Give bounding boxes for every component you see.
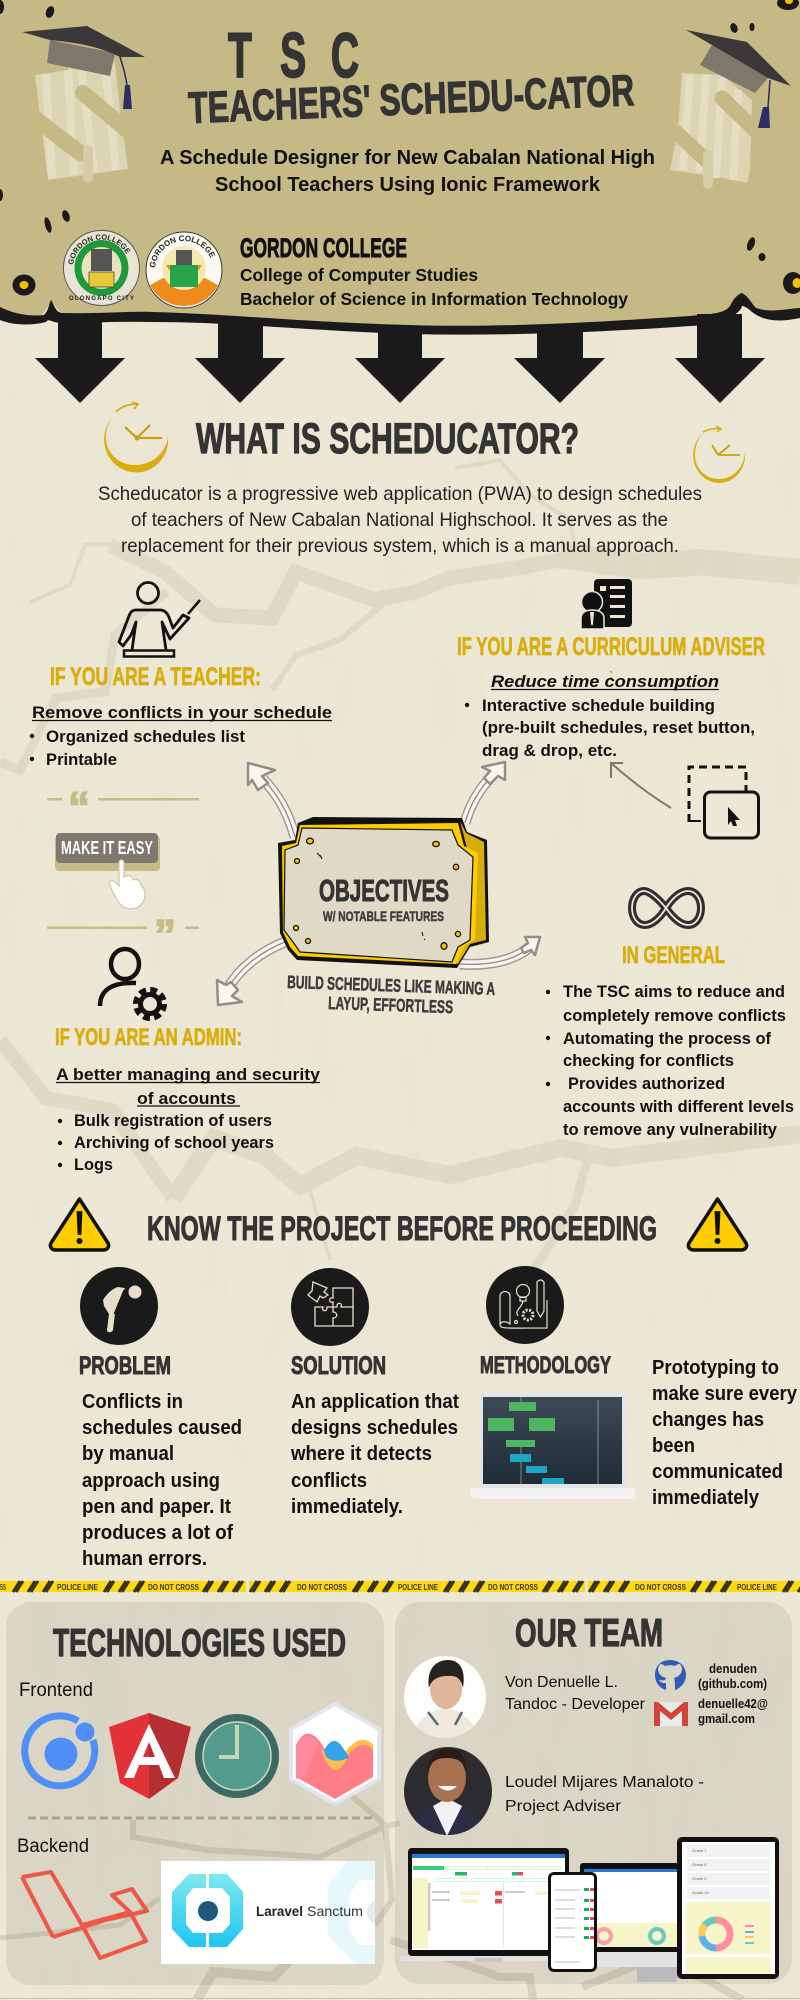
icon: problem [80,1267,158,1345]
heading: what is scheducator: WHAT IS SCHEDUCATOR? [196,415,579,463]
panel: objectives sign [278,817,489,968]
text: general list: to remove any vulnerability [563,1120,778,1139]
text: general list: completely remove conflicts [563,1006,786,1025]
text: admin features: of accounts [137,1089,236,1108]
text: email: gmail.com [698,1712,755,1726]
text: developer name [505,1674,646,1713]
quote decoration bottom: ” [154,911,176,960]
heading: technologies used: TECHNOLOGIES USED [53,1622,346,1665]
text: problem: human errors. [82,1548,207,1570]
heading: solution: SOLUTION [291,1352,386,1380]
photo: adviser [404,1747,494,1840]
intro paragraph: replacement for their previous system, which is a manual approach. [121,535,679,557]
text: general list: Automating the process of [563,1029,771,1048]
intro paragraph [98,483,702,557]
police tape: POLICE LINE [57,1583,99,1592]
text: general list: Provides authorized [568,1074,725,1093]
text: developer name: Tandoc - Developer [505,1696,646,1713]
quote decoration top: “ [68,783,90,832]
text: adviser features: (pre-built schedules, reset button, [482,718,755,737]
icon: github [655,1660,686,1690]
text: general list: checking for conflicts [563,1051,734,1070]
icon: hand pointer [109,860,145,909]
text: solution: immediately. [291,1496,403,1518]
police tape: POLICE LINE [737,1583,778,1592]
logo: angular [109,1713,191,1799]
text: adviser features: Reduce time consumption [491,672,719,691]
photo: developer [404,1656,486,1740]
image: tablet screenshot: Grade 9 [692,1876,707,1881]
image: tablet screenshot: Grade 10 [692,1890,709,1895]
text: objectives: OBJECTIVES [319,873,449,908]
text: problem: approach using [82,1470,220,1492]
logo: Gordon College seal: OLONGAPO CITY [69,296,134,302]
icon: right graduation cap and diploma [668,30,791,184]
tagline: LAYUP, EFFORTLESS [328,993,453,1017]
icon: teacher [119,582,200,656]
text: methodology description: changes has [652,1409,764,1431]
text: problem: produces a lot of [82,1522,233,1544]
text: general list: The TSC aims to reduce and [563,982,785,1001]
text: github handle: (github.com) [698,1677,767,1691]
logo: clock [195,1714,279,1798]
text: adviser features: drag & drop, etc. [482,741,617,760]
icon: warning right [688,1199,747,1250]
button: make it easy [55,833,160,909]
text: solution: designs schedules [291,1417,458,1439]
icon: admin [100,949,164,1018]
text: admin features: Archiving of school years [74,1134,274,1152]
police tape [0,1581,800,1592]
logo: Gordon College seal: GORDON COLLEGE [68,234,131,264]
logo: ionic [25,1716,95,1786]
text: github handle: denuden [709,1662,757,1676]
icon: solution [291,1268,369,1346]
text: methodology description: Prototyping to [652,1357,779,1379]
icon: left graduation cap and diploma [22,26,145,180]
icon: clock left [104,402,168,472]
college name [240,233,628,309]
text: solution: An application that [291,1391,459,1413]
icon: warning left [50,1199,109,1250]
text: admin features: A better managing and security [56,1065,321,1084]
text: general list: accounts with different levels [563,1097,794,1116]
title: TSC: TSC [228,22,359,91]
text: solution [290,1391,459,1518]
text: notable features: W/ NOTABLE FEATURES [323,908,444,924]
text: problem: Conflicts in [82,1391,183,1413]
icon: cursor drag [689,767,758,838]
panel: our team [395,1602,792,1984]
text: methodology description [652,1357,798,1509]
image: phone screenshot [548,1872,597,1972]
logo: College of Computer Studies seal: GORDON COLLEGE [150,235,216,268]
heading: methodology: METHODOLOGY [480,1352,611,1379]
tagline: BUILD SCHEDULES LIKE MAKING A [287,972,495,999]
text: teacher features [30,703,332,769]
text: email [698,1697,768,1726]
logo: laravel [22,1872,147,1958]
logo: laravel sanctum: Laravel [256,1903,303,1919]
police tape: DO NOT CROSS [148,1583,200,1592]
logo: laravel sanctum [161,1861,395,1964]
text: teacher features: Organized schedules list [46,727,245,746]
college name: Bachelor of Science in Information Technology [240,289,628,309]
button: make it easy: MAKE IT EASY [61,838,153,858]
panel: technologies used [6,1602,395,1985]
police tape: DO NOT CROSS [488,1583,539,1592]
text: problem [82,1391,242,1570]
logo: College of Computer Studies seal [146,232,222,308]
intro paragraph: Scheducator is a progressive web application (PWA) to design schedules [98,483,702,505]
text: teacher features: Remove conflicts in your schedule [32,703,332,722]
text: adviser name [505,1774,704,1815]
label: backend: Backend [17,1836,89,1857]
image: tablet screenshot: Grade 7 [692,1848,707,1853]
text: adviser name: Loudel Mijares Manaloto - [505,1774,704,1791]
text: general list [546,982,794,1139]
text: teacher features: Printable [46,750,117,769]
text: problem: schedules caused [82,1417,242,1439]
police tape: POLICE LINE [398,1583,439,1592]
subtitle: A Schedule Designer for New Cabalan National High [160,147,655,169]
icon: clock right [693,426,745,483]
intro paragraph: of teachers of New Cabalan National Highschool. It serves as the [131,509,668,531]
label: frontend: Frontend [19,1680,93,1701]
college name: GORDON COLLEGE [240,233,407,263]
heading: our team: OUR TEAM [515,1612,663,1655]
police tape: DO NOT CROSS [635,1583,687,1592]
logo: laravel sanctum: Sanctum [307,1903,363,1919]
logo: Gordon College seal [63,230,140,306]
arrow: to adviser [611,763,671,808]
college name: College of Computer Studies [240,265,478,285]
text: adviser features [465,672,755,760]
text: solution: conflicts [291,1470,367,1492]
text: email: denuelle42@ [698,1697,768,1711]
sketch arrows from objectives [217,762,540,1005]
text: methodology description: immediately [652,1487,760,1509]
text: methodology description: been [652,1435,695,1457]
image: tablet screenshot: Grade 8 [692,1862,707,1867]
text: github handle [698,1662,767,1691]
text: methodology description: communicated [652,1461,783,1483]
text: developer name: Von Denuelle L. [505,1674,618,1691]
dashed divider [28,1816,372,1820]
police tape: DO NOT CROSS [297,1583,348,1592]
tagline [287,972,495,1017]
text: adviser features: Interactive schedule building [482,696,715,715]
text: adviser name: Project Adviser [505,1798,622,1815]
icon: curriculum adviser [581,579,632,629]
title: Teachers' Schedu-cator: TEACHERS' SCHEDU-CATOR [187,66,635,133]
heading: admin: IF YOU ARE AN ADMIN: [55,1024,242,1051]
logo: chart.js [291,1704,379,1804]
image: monitor screenshot [580,1863,680,1982]
icon: gmail [654,1702,688,1726]
heading: problem: PROBLEM [79,1352,171,1380]
icon: infinity [632,891,701,925]
text: problem: pen and paper. It [82,1496,231,1518]
image: laptop with prototyping diagram [470,1392,636,1499]
heading: teacher: IF YOU ARE A TEACHER: [50,663,261,691]
heading: in general: IN GENERAL [622,942,725,969]
text: admin features: Bulk registration of users [74,1112,272,1130]
subtitle: School Teachers Using Ionic Framework [215,174,601,196]
text: admin features: Logs [74,1156,113,1174]
text: problem: by manual [82,1443,174,1465]
specks and bolts [0,0,800,296]
text: admin features [56,1065,321,1174]
header banner [0,0,800,335]
police tape: SS [0,1583,6,1592]
image: tablet screenshot [677,1837,779,1979]
text: solution: where it detects [290,1443,432,1465]
icon: methodology [486,1266,564,1344]
subtitle [160,147,655,196]
device mockups [400,1837,779,1982]
five down arrows [35,314,765,403]
image: laptop screenshot [400,1848,569,1962]
